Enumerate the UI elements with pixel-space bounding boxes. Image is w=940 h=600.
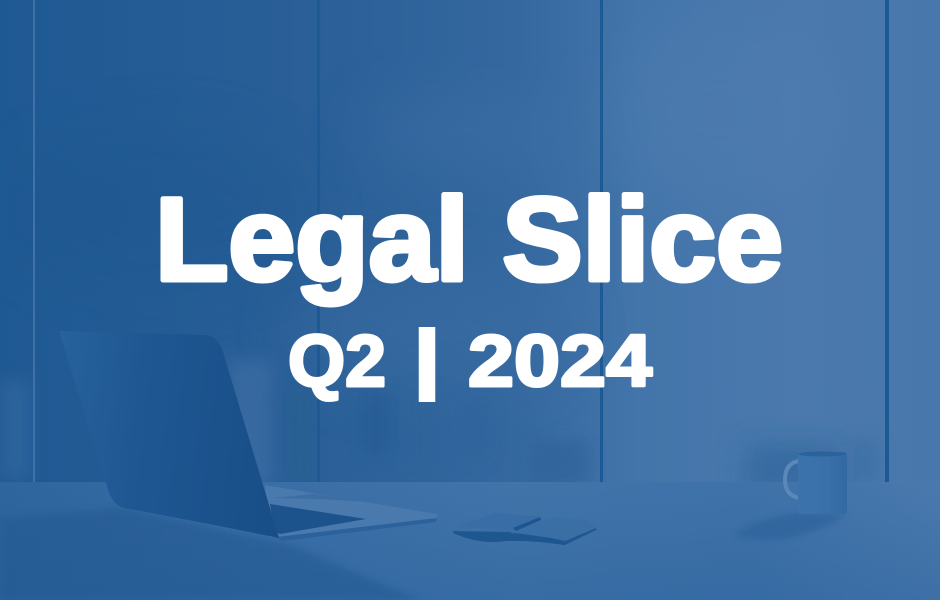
- subtitle: Q2: [288, 321, 386, 402]
- icon: notebook and pen: [453, 513, 596, 545]
- icon: coffee mug: [735, 452, 847, 539]
- desk surface: [0, 482, 940, 600]
- subtitle: |: [418, 319, 436, 398]
- blurred dark patch behind the mug: [745, 445, 840, 495]
- window mullions: [33, 0, 889, 484]
- blurred skyline behind the window: [0, 360, 880, 485]
- title: Legal Slice: [155, 174, 783, 306]
- subtitle: 2024: [468, 321, 652, 402]
- subtitle: [288, 319, 652, 402]
- icon: laptop: [59, 331, 437, 541]
